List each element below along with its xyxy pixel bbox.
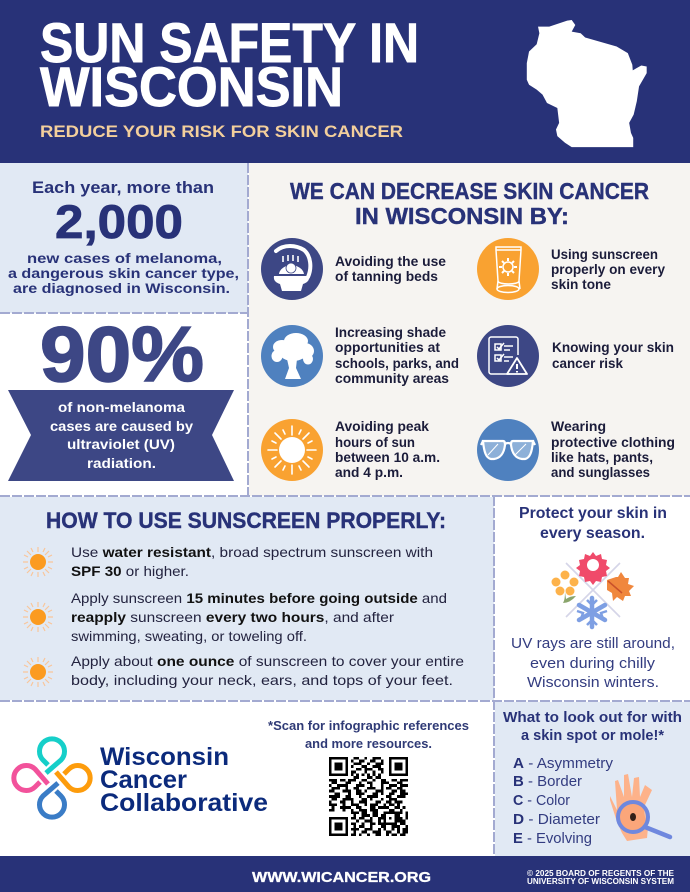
title bbox=[40, 11, 419, 118]
heading: Protect your skin in bbox=[519, 505, 667, 522]
text: risk: cancer risk bbox=[552, 356, 623, 371]
text: shade: community areas bbox=[335, 371, 449, 386]
text: clothing: like hats, pants, bbox=[551, 450, 653, 465]
icon: sun bullet 3 bbox=[23, 657, 53, 687]
text: sunscreen: Using sunscreen bbox=[551, 247, 658, 262]
text: UV rays: UV rays are still around, bbox=[511, 635, 675, 652]
text: tanning beds bbox=[335, 254, 446, 284]
text: melanoma description bbox=[8, 250, 239, 296]
icon: hand with magnifying glass bbox=[610, 774, 670, 841]
text: step 2: Apply sunscreen 15 minutes before going outside and bbox=[71, 590, 447, 606]
text: step 2 bbox=[71, 590, 447, 644]
text: peak hours: hours of sun bbox=[335, 435, 415, 450]
icon: sunglasses bbox=[477, 419, 539, 481]
heading bbox=[290, 178, 649, 229]
subtitle: REDUCE YOUR RISK FOR SKIN CANCER bbox=[40, 122, 403, 141]
logo wordmark: Cancer bbox=[100, 766, 187, 794]
text: step 3: Apply about one ounce of sunscreen to cover your entire bbox=[71, 653, 464, 669]
list: ABCDE bbox=[513, 756, 614, 847]
heading: every season. bbox=[540, 525, 645, 542]
list: ABCDE: E - Evolving bbox=[513, 831, 592, 847]
text: tanning beds: of tanning beds bbox=[335, 269, 438, 284]
title: SUN SAFETY IN bbox=[40, 11, 419, 74]
text: UV rays: Wisconsin winters. bbox=[527, 674, 659, 691]
text: clothing: and sunglasses bbox=[551, 465, 650, 480]
heading: What to look out for with bbox=[503, 710, 682, 726]
text: risk: Knowing your skin bbox=[552, 340, 674, 355]
heading bbox=[503, 710, 682, 744]
panel: ABCDE skin check bbox=[495, 702, 690, 856]
icon: winter snowflake bbox=[577, 598, 607, 627]
text: copyright: © 2025 BOARD OF REGENTS OF THE bbox=[527, 869, 675, 878]
panel: protect your skin in every season bbox=[495, 497, 690, 700]
text: step 2: reapply sunscreen every two hours , and after bbox=[71, 609, 394, 625]
panel: 2,000 melanoma statistic: Each year, more than bbox=[32, 178, 214, 197]
panel: footer bbox=[0, 856, 690, 892]
text: melanoma description: a dangerous skin cancer type, bbox=[8, 265, 239, 281]
banner: non-melanoma text: cases are caused by bbox=[50, 419, 194, 434]
text: risk bbox=[552, 340, 674, 371]
text: peak hours bbox=[335, 419, 440, 480]
panel: 90% statistic bbox=[0, 310, 247, 496]
icon: Wisconsin state silhouette bbox=[527, 20, 647, 147]
text: melanoma description: new cases of melanoma, bbox=[27, 250, 222, 266]
text: step 3 bbox=[71, 653, 464, 688]
text: step 1: Use water resistant , broad spectrum sunscreen with bbox=[71, 544, 433, 560]
panel: how to use sunscreen bbox=[0, 497, 494, 700]
icon: sunscreen tube bbox=[477, 238, 539, 300]
text: sunscreen bbox=[551, 247, 665, 292]
text: step 2: swimming, sweating, or toweling off. bbox=[71, 628, 307, 644]
text: scan prompt: and more resources. bbox=[305, 736, 432, 751]
logo wordmark: Collaborative bbox=[100, 789, 268, 817]
statistic: 2,000: 2,000 bbox=[55, 195, 183, 248]
text: tanning beds: Avoiding the use bbox=[335, 254, 446, 269]
list: ABCDE: D - Diameter bbox=[513, 812, 600, 828]
text: step 1 bbox=[71, 544, 433, 579]
text: peak hours: between 10 a.m. bbox=[335, 450, 440, 465]
list: ABCDE: B - Border bbox=[513, 774, 582, 790]
text: peak hours: and 4 p.m. bbox=[335, 465, 403, 480]
icon: four-loop knot bbox=[14, 739, 90, 817]
text: UV rays bbox=[511, 635, 675, 691]
text: clothing: protective clothing bbox=[551, 435, 675, 450]
panel: how we can decrease skin cancer bbox=[249, 163, 690, 496]
title: WISCONSIN bbox=[40, 55, 343, 118]
icon: spring flower bbox=[552, 570, 578, 603]
icon: summer sun bbox=[576, 552, 610, 585]
logo: Wisconsin Cancer Collaborative bbox=[14, 739, 268, 817]
text: clothing bbox=[551, 419, 675, 480]
panel: 2,000 melanoma statistic bbox=[0, 163, 248, 313]
banner: non-melanoma text bbox=[8, 390, 234, 481]
banner: non-melanoma text: radiation. bbox=[87, 456, 156, 471]
icon: sun bullet 2 bbox=[23, 602, 53, 632]
text: copyright bbox=[527, 869, 675, 886]
text: shade bbox=[335, 325, 459, 386]
statistic: 90%: 90% bbox=[40, 310, 204, 398]
list: ABCDE: C - Color bbox=[513, 793, 570, 809]
logo wordmark: Wisconsin bbox=[100, 743, 229, 771]
text: shade: schools, parks, and bbox=[335, 356, 459, 371]
text: scan prompt: *Scan for infographic references bbox=[268, 718, 469, 733]
text: melanoma description: are diagnosed in Wisconsin. bbox=[13, 280, 230, 296]
list: ABCDE: A - Asymmetry bbox=[513, 756, 614, 772]
text: website: WWW.WICANCER.ORG bbox=[252, 869, 431, 886]
icon: shade tree bbox=[261, 325, 323, 387]
icon: risk checklist bbox=[477, 325, 539, 387]
text: clothing: Wearing bbox=[551, 419, 606, 434]
text: step 3: body, including your neck, ears, and tops of your feet. bbox=[71, 672, 453, 688]
banner: non-melanoma text: of non-melanoma bbox=[58, 400, 186, 415]
text: sunscreen: skin tone bbox=[551, 277, 611, 292]
icon: four seasons bbox=[552, 552, 634, 627]
heading: IN WISCONSIN BY: bbox=[355, 203, 569, 229]
icon: autumn leaf bbox=[607, 572, 634, 601]
text: copyright: UNIVERSITY OF WISCONSIN SYSTEM bbox=[527, 877, 674, 886]
logo wordmark bbox=[100, 743, 268, 817]
text: shade: Increasing shade bbox=[335, 325, 446, 340]
text: scan prompt bbox=[268, 718, 469, 751]
panel: header bbox=[0, 0, 690, 163]
text: peak hours: Avoiding peak bbox=[335, 419, 430, 434]
icon: sun bullet 1 bbox=[23, 547, 53, 577]
text: UV rays: even during chilly bbox=[530, 655, 656, 672]
heading: a skin spot or mole!* bbox=[521, 728, 664, 744]
QR code bbox=[329, 757, 408, 836]
banner: non-melanoma text: ultraviolet (UV) bbox=[67, 437, 175, 452]
icon: tanning bed bbox=[261, 238, 323, 300]
icon: sun bbox=[261, 419, 323, 481]
heading: HOW TO USE SUNSCREEN PROPERLY: bbox=[46, 508, 446, 533]
panel: logo and QR code bbox=[0, 702, 494, 856]
text: step 1: SPF 30 or higher. bbox=[71, 563, 189, 579]
text: sunscreen: properly on every bbox=[551, 262, 665, 277]
heading bbox=[519, 505, 667, 542]
text: shade: opportunities at bbox=[335, 340, 441, 355]
heading: WE CAN DECREASE SKIN CANCER bbox=[290, 178, 649, 204]
